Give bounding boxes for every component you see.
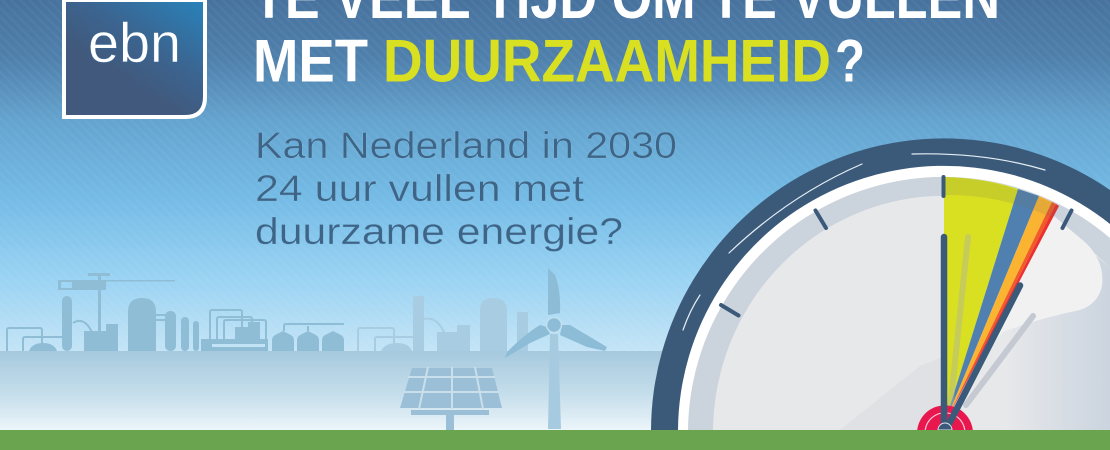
title: DUURZAAMHEID: [383, 28, 831, 94]
subtitle: Kan Nederland in 2030: [255, 125, 677, 166]
title: [253, 0, 1000, 94]
dial ticks: [721, 177, 1072, 316]
clock dial rim: [688, 177, 1110, 430]
title: MET: [253, 28, 368, 94]
illustration: wind turbine: [505, 268, 607, 429]
clock: [651, 138, 1110, 430]
clock hand: vertical: [941, 237, 947, 426]
subtitle: [255, 125, 677, 252]
clock dial face: [713, 196, 1110, 430]
energy wedge: red: [944, 204, 1059, 425]
clock hand: diagonal: [948, 286, 1020, 426]
energy wedge: yellow: [944, 177, 1018, 425]
energy wedge: orange: [944, 196, 1052, 425]
logo: ebn: [64, 0, 205, 117]
illustration: industrial skyline left: [7, 273, 344, 351]
illustration: solar panel: [400, 367, 502, 430]
ground: [0, 430, 1110, 450]
bezel inner white ring: [678, 166, 1110, 430]
subtitle: 24 uur vullen met: [255, 168, 585, 209]
wedge rim shade: [944, 177, 1059, 218]
logo: ebn: ebn: [88, 11, 181, 74]
energy wedge: blue: [944, 189, 1039, 425]
title: ?: [835, 28, 865, 94]
clock bezel: [651, 138, 1110, 430]
bezel highlights: [683, 154, 1045, 330]
clock pivot: [938, 423, 952, 430]
hand shadows: [950, 237, 1033, 410]
energy wedge: red-orange: [944, 202, 1056, 425]
skyline haze band: [0, 351, 700, 430]
dial shading: [840, 216, 1110, 430]
clock centre hub: [917, 405, 973, 430]
illustration: industrial skyline right: [358, 296, 528, 351]
subtitle: duurzame energie?: [255, 211, 623, 252]
